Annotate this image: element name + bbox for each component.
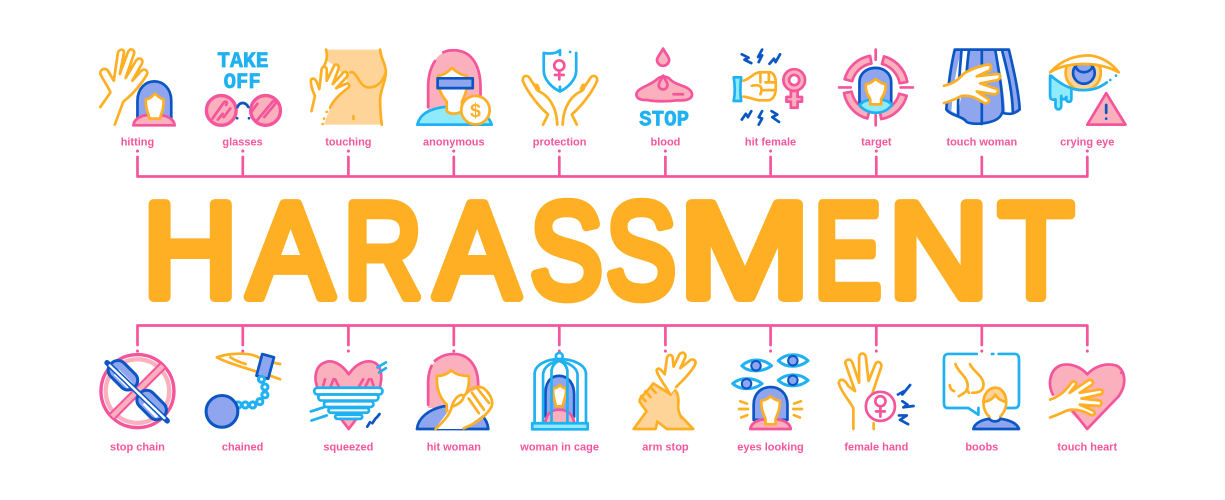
bottom row right: arm stop to touch heart: [634, 353, 1124, 453]
item: female hand: [839, 354, 914, 453]
title: R: [344, 175, 422, 326]
item: chained: chained: [222, 441, 263, 453]
item: hitting: [100, 49, 175, 149]
item: anonymous: anonymous: [423, 137, 485, 149]
item: hit woman: [417, 354, 493, 453]
item: protection: protection: [533, 137, 587, 149]
item: anonymous: [417, 50, 492, 149]
item: glasses: [206, 48, 280, 149]
item: eyes looking: eyes looking: [737, 441, 804, 453]
title: T: [998, 175, 1074, 326]
item: anonymous: $: [470, 100, 481, 122]
item: glasses: glasses: [222, 137, 263, 149]
item: touch heart: touch heart: [1057, 441, 1117, 453]
bottom connector bracket: [138, 326, 1087, 351]
item: blood: STOP: [639, 107, 689, 133]
item: crying eye: [1050, 55, 1125, 149]
item: touch woman: [944, 50, 1020, 149]
item: glasses: OFF: [224, 69, 261, 95]
item: crying eye: crying eye: [1060, 137, 1114, 149]
title: S: [606, 175, 676, 326]
item: woman in cage: woman in cage: [519, 441, 599, 453]
item: boobs: [944, 354, 1019, 453]
top row right: blood to crying eye: [636, 49, 1125, 149]
item: female hand: female hand: [844, 441, 908, 453]
item: blood: [636, 49, 692, 149]
item: woman in cage: [519, 353, 599, 453]
item: stop chain: stop chain: [110, 441, 165, 453]
item: touch woman: touch woman: [946, 137, 1017, 149]
title: M: [679, 175, 810, 326]
item: stop chain: [101, 355, 174, 453]
item: squeezed: [311, 361, 386, 453]
item: hit woman: hit woman: [427, 441, 481, 453]
title: S: [530, 175, 603, 326]
item: hitting: hitting: [121, 137, 154, 149]
item: squeezed: squeezed: [323, 441, 373, 453]
item: boobs: boobs: [965, 441, 998, 453]
item: chained: [206, 354, 280, 453]
bottom row left: stop chain to woman in cage: [101, 353, 599, 453]
item: hit female: hit female: [745, 137, 796, 149]
item: touching: touching: [325, 137, 372, 149]
item: target: target: [861, 137, 892, 149]
item: blood: blood: [651, 137, 680, 149]
title: A: [435, 175, 519, 326]
item: target: [839, 50, 913, 149]
item: protection: [523, 50, 597, 149]
top row left: hitting to protection: [100, 48, 597, 149]
item: glasses: TAKE: [217, 48, 269, 74]
item: touching: [311, 50, 386, 149]
item: eyes looking: [733, 355, 808, 453]
title: H: [143, 175, 238, 326]
title: N: [888, 175, 989, 326]
item: touch heart: [1050, 364, 1124, 453]
top connector bracket: [138, 151, 1087, 176]
item: arm stop: arm stop: [642, 441, 689, 453]
title: E: [814, 175, 882, 326]
item: hit female: [734, 50, 805, 149]
title: A: [248, 175, 333, 326]
item: arm stop: [634, 353, 695, 453]
